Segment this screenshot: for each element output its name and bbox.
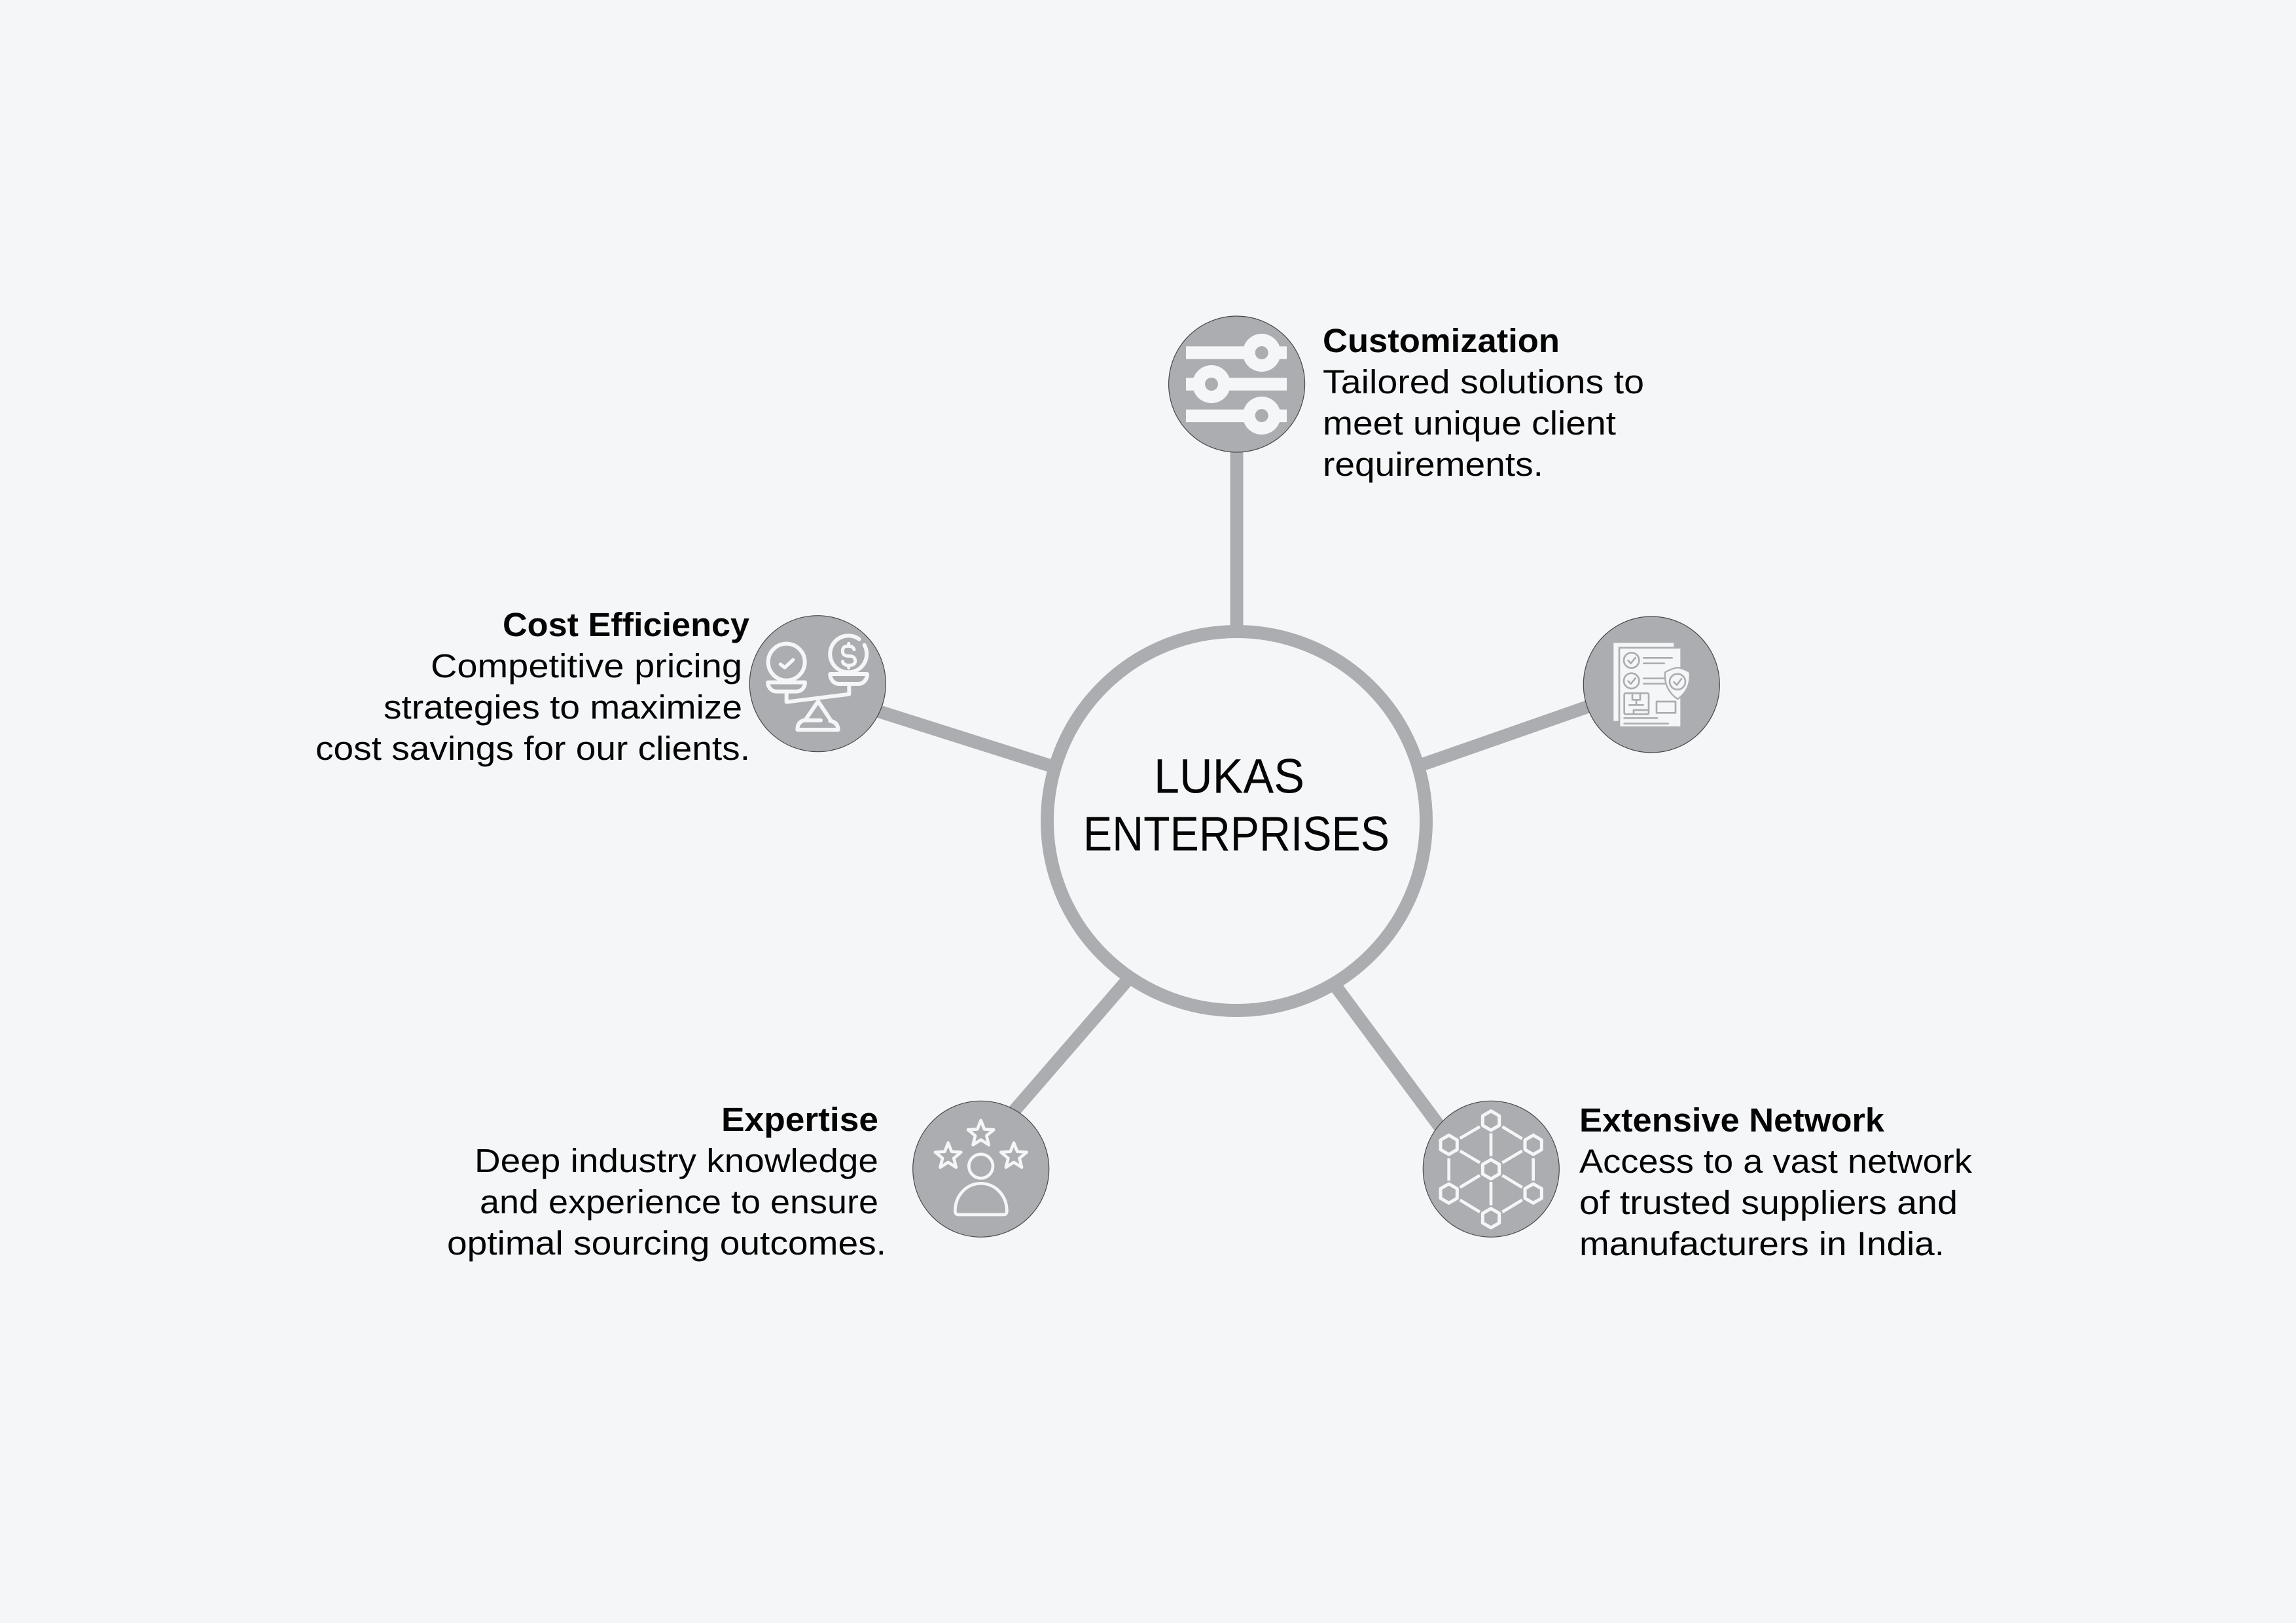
hub title: LUKAS (1154, 749, 1304, 804)
connector: customization (1230, 445, 1244, 632)
text block: extensive network: manufacturers in India. (1579, 1225, 1945, 1262)
central hub (1047, 632, 1426, 1010)
text block: customization (1323, 322, 1644, 483)
icon: person with three stars (expertise) (913, 1101, 1049, 1237)
text block: cost efficiency: Cost Efficiency (503, 606, 750, 643)
hub title: ENTERPRISES (1083, 806, 1390, 861)
text block: cost efficiency: Competitive pricing (431, 647, 742, 685)
hub title (1083, 749, 1390, 861)
text block: customization: Tailored solutions to (1323, 363, 1644, 401)
text block: cost efficiency (315, 606, 750, 767)
text block: cost efficiency: cost savings for our clients. (315, 730, 750, 767)
text block: expertise: optimal sourcing outcomes. (447, 1224, 886, 1262)
text block: expertise: and experience to ensure (480, 1183, 878, 1221)
text block: extensive network: Access to a vast network (1579, 1143, 1973, 1180)
text block: extensive network: of trusted suppliers and (1579, 1184, 1958, 1221)
text block: cost efficiency: strategies to maximize (384, 688, 742, 726)
connector: compliance document (1419, 704, 1597, 766)
connector: expertise (1001, 980, 1128, 1126)
text block: expertise: Deep industry knowledge (475, 1142, 878, 1179)
text block: expertise: Expertise (721, 1101, 878, 1138)
connector: extensive network (1333, 983, 1444, 1132)
text block: extensive network: Extensive Network (1579, 1101, 1885, 1139)
icon: hexagon network (1423, 1101, 1559, 1237)
text block: customization: meet unique client (1323, 404, 1616, 442)
icon: balance scale (cost efficiency) (749, 616, 886, 752)
connector: cost efficiency (870, 709, 1055, 767)
text block: customization: requirements. (1323, 446, 1543, 483)
text block: expertise (447, 1101, 886, 1262)
text block: extensive network (1579, 1101, 1973, 1262)
icon: checklist document with shield (1583, 616, 1719, 753)
text block: customization: Customization (1323, 322, 1560, 359)
icon: sliders (customization) (1169, 316, 1305, 452)
